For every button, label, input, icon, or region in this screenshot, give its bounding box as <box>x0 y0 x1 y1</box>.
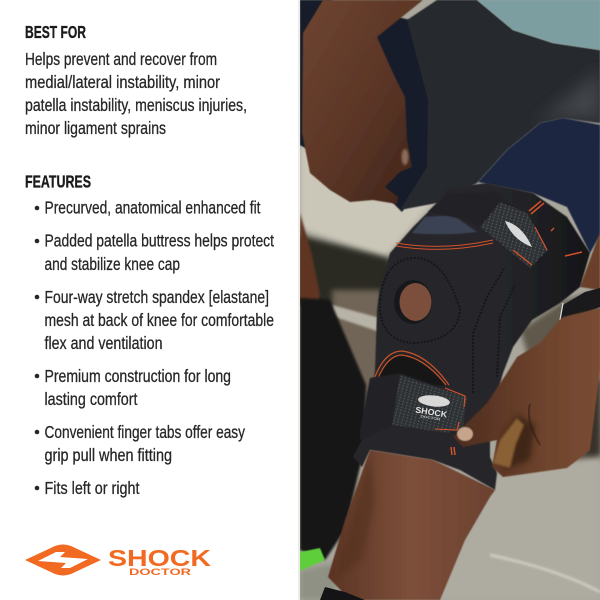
upper strap tab <box>480 202 548 268</box>
feature: four-way stretch mesh <box>35 287 274 353</box>
lower strap logo <box>418 395 450 407</box>
feature: precurved fit: Precurved, anatomical enhanced fit <box>44 198 261 218</box>
photo background <box>300 0 600 600</box>
text block: best for description <box>25 49 247 138</box>
black ankle sock <box>320 587 365 600</box>
orange side stitches <box>451 201 582 455</box>
icon: logo diamond with bolt <box>25 544 101 576</box>
upper strap logo <box>505 221 532 247</box>
feature: four-way stretch mesh: mesh at back of knee for comfortable <box>44 310 274 330</box>
logo wordmark: SHOCK <box>108 545 211 571</box>
stitched seams <box>380 258 515 393</box>
calf shin shadow <box>344 455 375 568</box>
upper strap <box>428 202 548 268</box>
heading: features: FEATURES <box>25 172 91 192</box>
photo: athlete fitting knee brace <box>300 0 600 600</box>
logo wordmark <box>108 545 211 578</box>
heading: best for: BEST FOR <box>25 22 86 42</box>
feature: premium construction <box>35 366 231 409</box>
feature: four-way stretch mesh: flex and ventilation <box>44 333 162 353</box>
thumb nail <box>457 427 473 441</box>
orange arc lower <box>375 351 449 385</box>
text block: best for description: Helps prevent and recover from <box>25 49 217 69</box>
feature: premium construction: lasting comfort <box>44 389 138 409</box>
watch <box>560 288 600 320</box>
curled fingers <box>493 418 524 468</box>
shorts highlight <box>548 74 600 125</box>
dark sock behind <box>300 298 366 560</box>
calf behind <box>300 213 320 305</box>
right hand <box>453 308 600 477</box>
feature: four-way stretch mesh: Four-way stretch spandex [elastane] <box>44 287 269 307</box>
feature: fits left or right: Fits left or right <box>44 478 140 498</box>
thumbnail <box>402 149 408 165</box>
grey shorts <box>400 0 600 210</box>
feature list <box>35 198 274 498</box>
teal shirt <box>477 0 600 50</box>
feature: patella buttress: Padded patella buttress helps protect <box>44 231 274 251</box>
dark pad under lower arc <box>378 355 446 385</box>
navy compression shorts <box>300 0 432 212</box>
panel edge strip <box>298 0 300 600</box>
lower strap text: SHOCK <box>415 405 449 420</box>
green shoe <box>300 548 325 571</box>
feature: patella buttress <box>35 231 274 274</box>
knee brace body <box>353 183 590 490</box>
hand on thigh <box>302 0 423 204</box>
orange stitching upper <box>396 240 493 249</box>
text block: best for description: patella instability, meniscus injuries, <box>25 95 247 115</box>
lower strap tab <box>392 375 467 433</box>
curled fingers shadow <box>500 415 535 470</box>
finger creases <box>529 404 540 445</box>
text block: best for description: medial/lateral instability, minor <box>25 72 220 92</box>
feature: finger tabs: grip pull when fitting <box>44 445 172 465</box>
text block: best for description: minor ligament sprains <box>25 118 166 138</box>
feature: patella buttress: and stabilize knee cap <box>44 254 180 274</box>
text panel background <box>0 0 300 600</box>
feature: finger tabs: Convenient finger tabs offer easy <box>44 422 245 442</box>
lower strap <box>360 373 467 440</box>
navy thigh sleeve <box>478 118 600 253</box>
logo wordmark: DOCTOR <box>129 567 191 578</box>
lower strap text: DOCTOR <box>420 414 441 422</box>
patella pad top <box>412 215 477 234</box>
feature: finger tabs <box>35 422 245 465</box>
feature: premium construction: Premium construction for long <box>44 366 231 386</box>
logo: shock doctor <box>25 544 211 578</box>
calf <box>328 450 495 600</box>
forearm wedge <box>580 232 600 290</box>
patella hole <box>394 280 432 324</box>
